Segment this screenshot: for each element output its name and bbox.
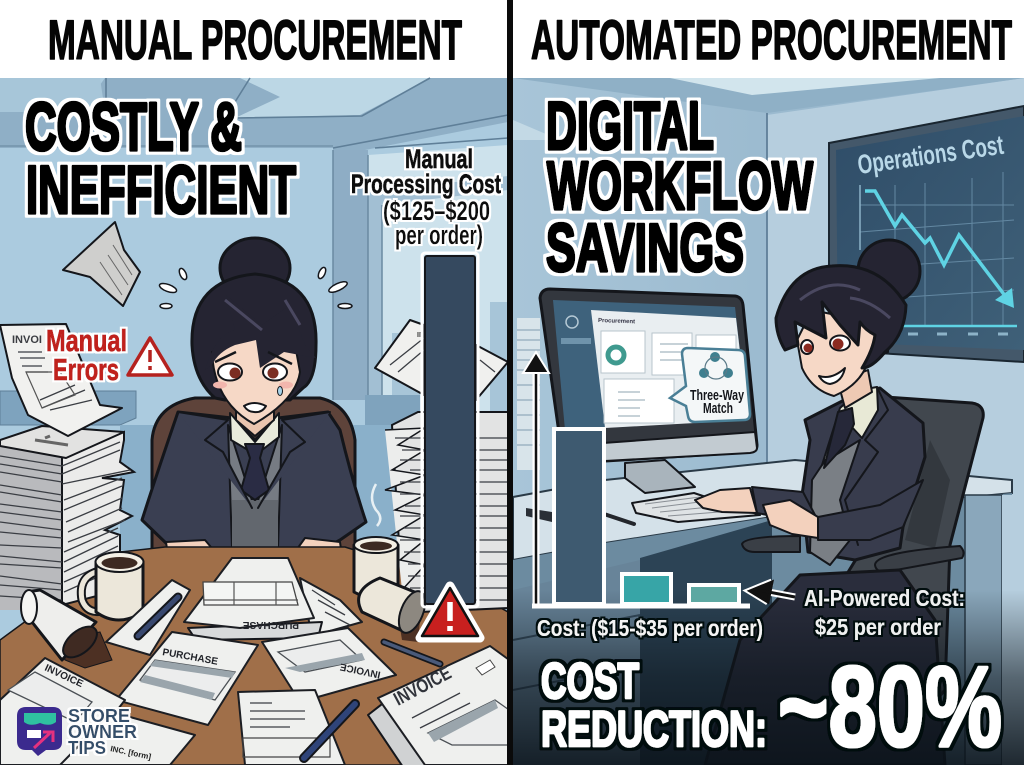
callout: three-way match: Three-Way xyxy=(690,387,744,404)
papers on desk: INC. [form] xyxy=(110,744,152,762)
logo text xyxy=(68,706,137,758)
tie xyxy=(824,408,854,468)
icon: warning triangle xyxy=(128,338,172,375)
chair xyxy=(730,397,983,765)
wall screen: operations cost chart xyxy=(829,106,1024,362)
teal bar xyxy=(622,574,671,604)
purchase sheet xyxy=(116,632,258,725)
label: manual processing cost: per order) xyxy=(395,220,483,250)
paper stack right xyxy=(385,412,508,612)
hair xyxy=(776,266,906,368)
stacked sheets xyxy=(188,622,322,640)
flying paper: invoice xyxy=(0,324,122,436)
hands xyxy=(166,540,232,578)
heading: manual procurement: MANUAL PROCUREMENT xyxy=(48,8,462,71)
sheet behind left xyxy=(106,580,190,655)
sleeve right xyxy=(818,480,923,540)
cup: right mug xyxy=(354,537,398,598)
sheet bottom left xyxy=(60,712,195,765)
jacket xyxy=(142,412,366,552)
heading: costly and inefficient: COSTLY & xyxy=(25,89,242,165)
right wall xyxy=(767,78,1024,500)
heading: digital workflow savings: SAVINGS xyxy=(546,210,744,286)
label: manual processing cost: Manual xyxy=(405,144,473,174)
big invoice stack xyxy=(368,690,470,765)
heading: digital workflow savings: WORKFLOW xyxy=(547,148,814,224)
tie xyxy=(241,444,269,500)
cup: fallen left with spill xyxy=(21,590,112,668)
heading: costly and inefficient: INEFFICIENT xyxy=(26,152,296,228)
logo text: OWNER xyxy=(68,722,137,742)
pen: right xyxy=(384,642,440,664)
axis base xyxy=(532,604,750,608)
callout: three-way match xyxy=(670,348,750,422)
face xyxy=(212,335,300,424)
pen: centre left xyxy=(138,597,178,636)
label: AI-powered cost xyxy=(804,585,965,640)
label: cost range: Cost: ($15-$35 per order) xyxy=(537,615,763,641)
icon: red warning triangle xyxy=(420,586,480,638)
shelf left xyxy=(517,318,540,470)
purchase order xyxy=(184,558,314,628)
panel: automated procurement scene xyxy=(513,78,1024,765)
pen: bottom xyxy=(304,704,355,758)
resting hand xyxy=(763,500,818,538)
chin xyxy=(603,432,757,461)
label: AI-powered cost: $25 per order xyxy=(815,614,941,640)
vest xyxy=(810,440,860,565)
papers on desk: INVOICE xyxy=(43,663,85,690)
desk xyxy=(0,547,508,765)
frame xyxy=(540,289,757,461)
shirt collar xyxy=(230,413,279,450)
flying paper: right xyxy=(375,320,508,400)
bar outline xyxy=(422,253,478,607)
papers on desk: INVOICE xyxy=(339,660,382,680)
collar xyxy=(822,387,878,465)
monitor xyxy=(540,289,757,493)
dark bottom gradient xyxy=(513,590,1024,765)
bottom centre sheet xyxy=(238,690,345,765)
face xyxy=(797,310,888,396)
logo mark xyxy=(17,707,62,756)
screen xyxy=(553,300,748,430)
sheet behind right xyxy=(300,578,362,636)
logo text: STORE xyxy=(68,706,130,726)
neck xyxy=(236,400,274,436)
lapel xyxy=(845,387,888,545)
cup: left mug xyxy=(81,552,144,620)
bar: manual cost xyxy=(425,256,475,604)
teal bar small xyxy=(689,585,739,604)
flying paper: invoice: INVOI xyxy=(12,334,42,346)
flying paper: right: IN xyxy=(417,332,424,339)
heading: cost reduction: REDUCTION: xyxy=(541,701,767,757)
papers on desk: INVOICE xyxy=(390,663,455,710)
arrow: AI-powered cost xyxy=(750,582,795,602)
ceiling xyxy=(0,78,508,150)
ceiling xyxy=(513,78,1024,113)
jacket xyxy=(802,388,925,560)
flying paper: top xyxy=(63,222,140,306)
trousers xyxy=(705,570,945,765)
shock marks xyxy=(158,266,352,308)
hair back xyxy=(192,274,316,400)
panel: manual procurement scene xyxy=(0,78,512,765)
papers on desk: PURCHASE xyxy=(161,647,219,668)
heading: costly and inefficient xyxy=(25,89,296,228)
papers on desk xyxy=(0,558,512,765)
label: manual processing cost: ($125–$200 xyxy=(383,196,490,226)
label: AI-powered cost: AI-Powered Cost: xyxy=(804,585,965,611)
chair xyxy=(152,398,355,560)
label: manual processing cost: Processing Cost xyxy=(351,169,501,199)
dark object on desk xyxy=(526,508,552,522)
mouth xyxy=(244,403,266,412)
pillar and window xyxy=(333,150,368,400)
trend line xyxy=(865,191,1009,301)
heading: cost reduction xyxy=(541,653,767,757)
heading: cost reduction: COST xyxy=(541,653,639,709)
label: manual errors: Manual xyxy=(46,323,127,358)
tall bar xyxy=(554,429,604,604)
steam xyxy=(372,484,380,526)
stand xyxy=(625,460,695,493)
logo text: TIPS xyxy=(68,738,106,758)
lapels xyxy=(178,412,330,508)
eyes xyxy=(218,364,242,380)
label: manual errors xyxy=(46,323,127,387)
keyboard xyxy=(632,493,760,522)
logo: store owner tips xyxy=(17,706,137,758)
papers on desk: PURCHASE xyxy=(243,619,299,630)
label: manual processing cost xyxy=(351,144,501,250)
sweat drop xyxy=(278,386,282,396)
callout: three-way match: Match xyxy=(703,400,733,417)
hand on keyboard xyxy=(695,488,757,513)
vest xyxy=(228,425,282,548)
label: manual errors: Errors xyxy=(53,352,119,387)
neck xyxy=(838,370,872,408)
header band xyxy=(0,0,1024,78)
businesswoman: smiling xyxy=(695,240,945,765)
monitor: Procurement xyxy=(598,318,635,325)
heading: digital workflow savings: DIGITAL xyxy=(546,88,714,164)
businesswoman: stressed xyxy=(142,238,366,578)
bottom left invoice xyxy=(0,658,125,765)
smile xyxy=(819,368,845,384)
inverted invoice xyxy=(262,628,396,702)
centre divider xyxy=(507,0,513,765)
bar chart: automated cost xyxy=(523,352,750,606)
paper stack left xyxy=(0,426,134,610)
axis arrow xyxy=(523,352,549,605)
sleeve to keyboard xyxy=(752,487,815,522)
desk xyxy=(513,460,1024,765)
cup: fallen right with spill xyxy=(359,578,430,642)
bun xyxy=(220,238,290,298)
eyes xyxy=(801,340,813,354)
pen xyxy=(604,514,634,524)
bun xyxy=(858,240,920,302)
back cabinet left xyxy=(0,391,136,425)
heading: digital workflow savings xyxy=(546,88,814,286)
tier top xyxy=(0,445,62,610)
bangs xyxy=(205,295,316,370)
